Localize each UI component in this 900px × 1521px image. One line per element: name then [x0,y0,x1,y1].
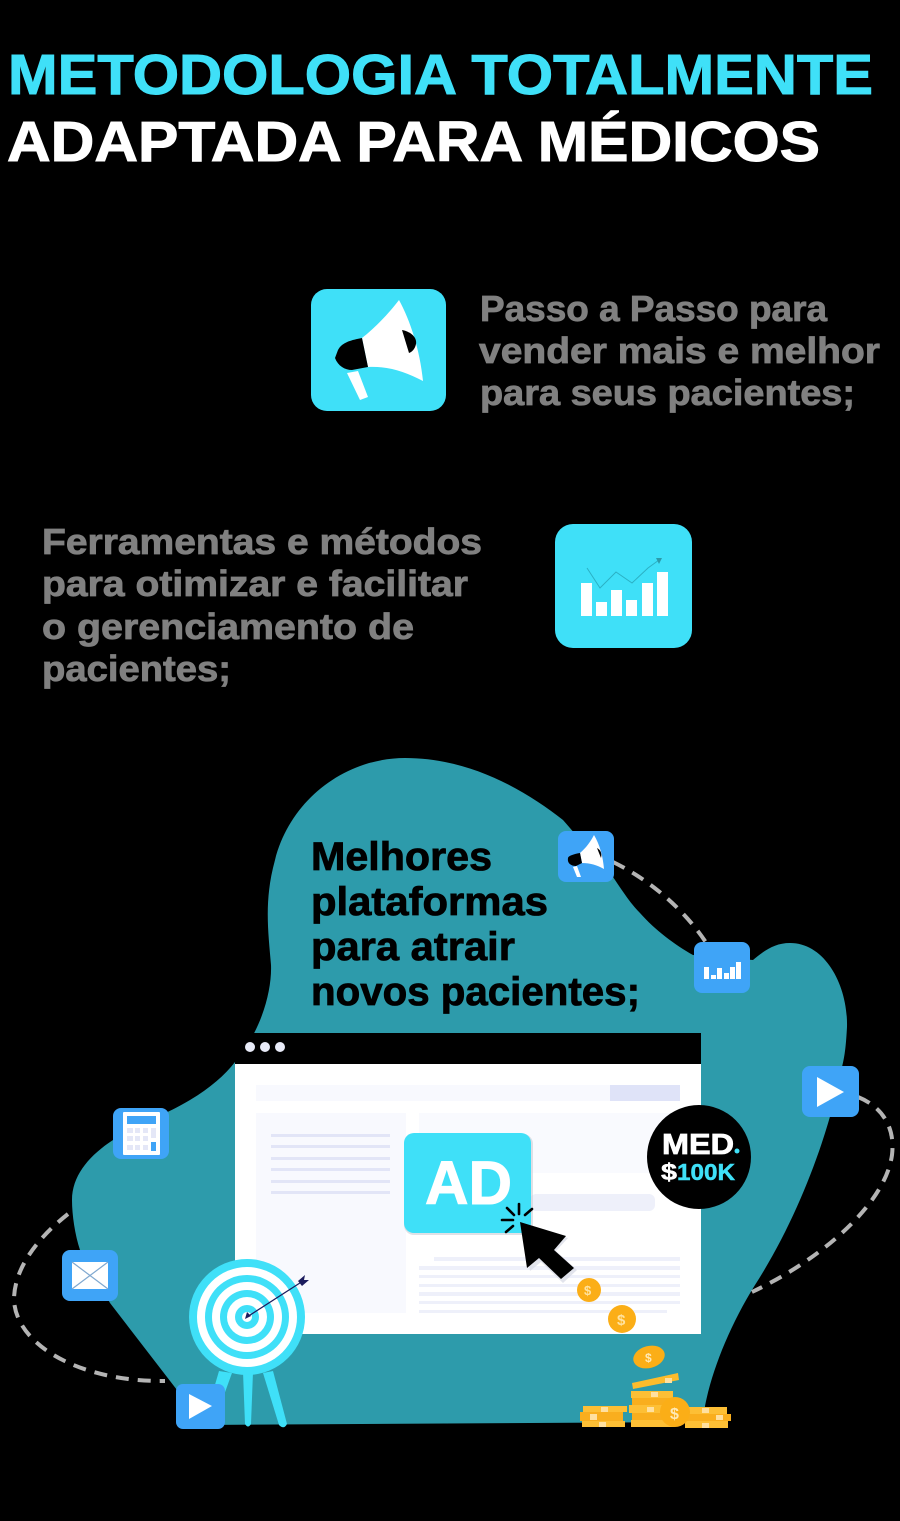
icon: bar chart tile [555,524,692,648]
text: melhores plataformas: Melhores [311,835,492,879]
icon tile: chart small [694,942,750,993]
text: ferramentas e métodos [42,521,482,689]
icon tile: play right [802,1066,859,1117]
falling coins: $ [584,1283,592,1298]
ad button: AD [425,1149,512,1217]
text: ferramentas e métodos: Ferramentas e métodos [42,521,482,562]
stack of gold coins [580,1342,731,1428]
icon tile: envelope [62,1250,118,1301]
click cursor [502,1204,577,1283]
title [7,43,873,174]
text: passo a passo [479,288,880,413]
text: ferramentas e métodos: para otimizar e facilitar [42,563,468,604]
text: melhores plataformas: para atrair [311,925,515,969]
falling coins: $ [617,1312,626,1329]
icon: megaphone tile [311,289,446,411]
badge: MED. $100K: $ [661,1159,677,1185]
text: passo a passo: Passo a Passo para [480,288,828,329]
title: METODOLOGIA TOTALMENTE [8,43,873,107]
icon tile: calculator [113,1108,169,1159]
falling coins [577,1278,636,1333]
text: melhores plataformas [311,835,640,1014]
dashed connector lines [14,862,893,1381]
icon tile: megaphone small [558,831,614,882]
teal blob background [72,758,847,1425]
text: ferramentas e métodos: pacientes; [42,648,231,689]
target with arrow [189,1259,309,1427]
browser window with ad [235,1033,701,1334]
text: passo a passo: vender mais e melhor [479,330,880,371]
stack of gold coins: $ [670,1406,679,1423]
badge: MED. $100K [647,1105,751,1209]
stack of gold coins: $ [645,1351,652,1365]
badge: MED. $100K: 100K [677,1159,735,1185]
title: ADAPTADA PARA MÉDICOS [7,110,820,174]
badge: MED. $100K: MED [662,1129,734,1161]
text: melhores plataformas: plataformas [311,880,548,924]
ad button [404,1133,533,1235]
text: melhores plataformas: novos pacientes; [311,970,640,1014]
text: ferramentas e métodos: o gerenciamento de [42,606,414,647]
icon tile: play left [176,1384,225,1429]
text: passo a passo: para seus pacientes; [480,372,855,413]
